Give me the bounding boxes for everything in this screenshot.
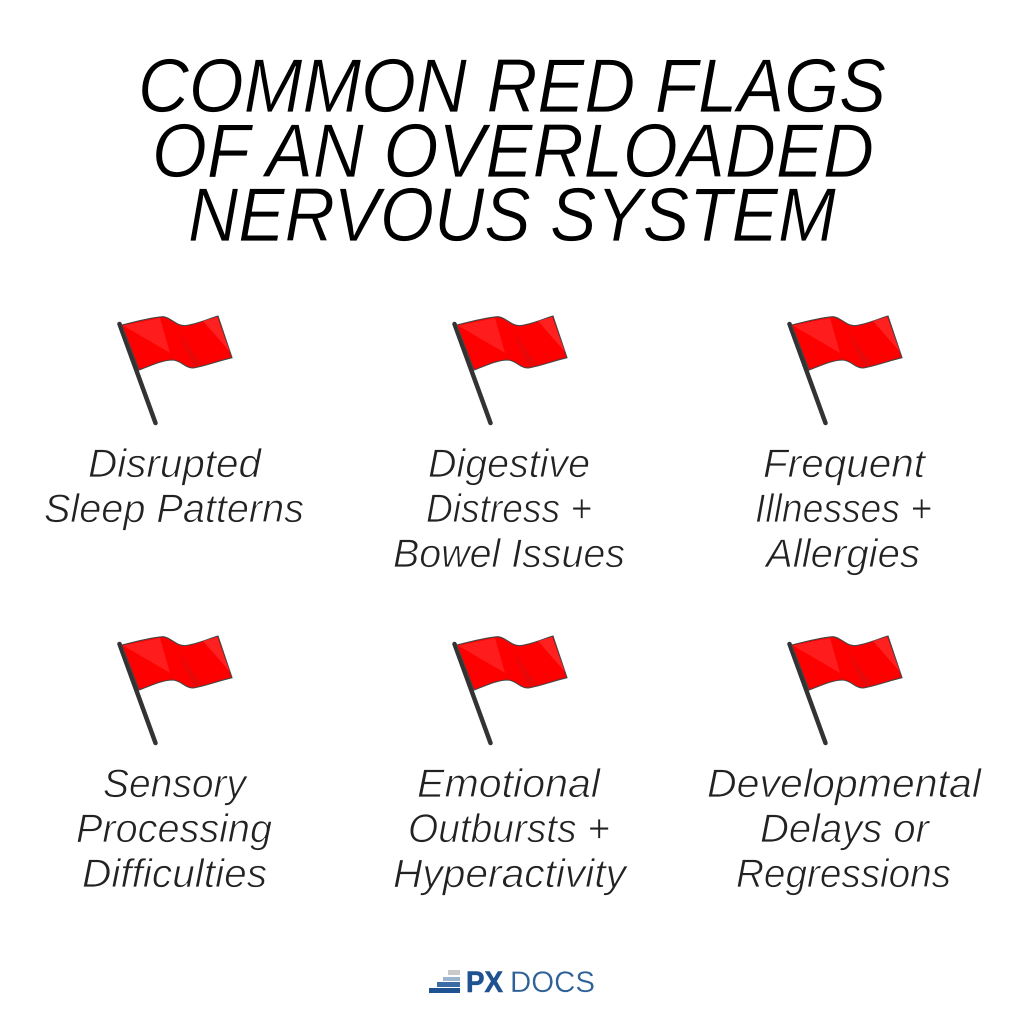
text: developmental delays: Regressions	[736, 852, 951, 896]
text: disrupted sleep patterns	[44, 442, 304, 531]
text: digestive distress: Distress +	[426, 487, 592, 531]
icon: red flag 1	[120, 316, 232, 423]
text: developmental delays: Developmental	[707, 762, 982, 806]
text: frequent illnesses: Allergies	[764, 532, 920, 576]
text: emotional outbursts: Emotional	[417, 762, 601, 806]
text: emotional outbursts	[393, 762, 629, 896]
logo: PX Docs: PX	[466, 966, 503, 999]
text: developmental delays: Delays or	[760, 807, 931, 851]
text: frequent illnesses: Illnesses +	[755, 487, 932, 531]
text: sensory processing	[76, 762, 272, 896]
logo: PX Docs	[429, 966, 595, 999]
icon: red flag 4	[120, 636, 232, 743]
title: OF AN OVERLOADED	[152, 109, 874, 194]
text: sensory processing: Difficulties	[82, 852, 267, 896]
text: digestive distress	[393, 442, 625, 576]
title: COMMON RED FLAGS	[138, 44, 886, 129]
text: sensory processing: Sensory	[103, 762, 249, 806]
text: sensory processing: Processing	[76, 807, 272, 851]
text: frequent illnesses: Frequent	[763, 442, 927, 486]
icon: red flag 2	[454, 316, 567, 423]
text: frequent illnesses	[755, 442, 932, 576]
text: disrupted sleep patterns: Disrupted	[88, 442, 263, 486]
text: digestive distress: Bowel Issues	[393, 532, 625, 576]
title: NERVOUS SYSTEM	[188, 173, 837, 258]
icon: red flag 6	[790, 636, 902, 743]
icon: red flag 3	[790, 316, 902, 423]
text: developmental delays	[707, 762, 982, 896]
text: digestive distress: Digestive	[428, 442, 590, 486]
title	[138, 44, 886, 258]
text: disrupted sleep patterns: Sleep Patterns	[44, 487, 304, 531]
icon: red flag 5	[454, 636, 567, 743]
text: emotional outbursts: Outbursts +	[408, 807, 610, 851]
logo: PX Docs: DOCS	[510, 966, 595, 999]
text: emotional outbursts: Hyperactivity	[393, 852, 629, 896]
